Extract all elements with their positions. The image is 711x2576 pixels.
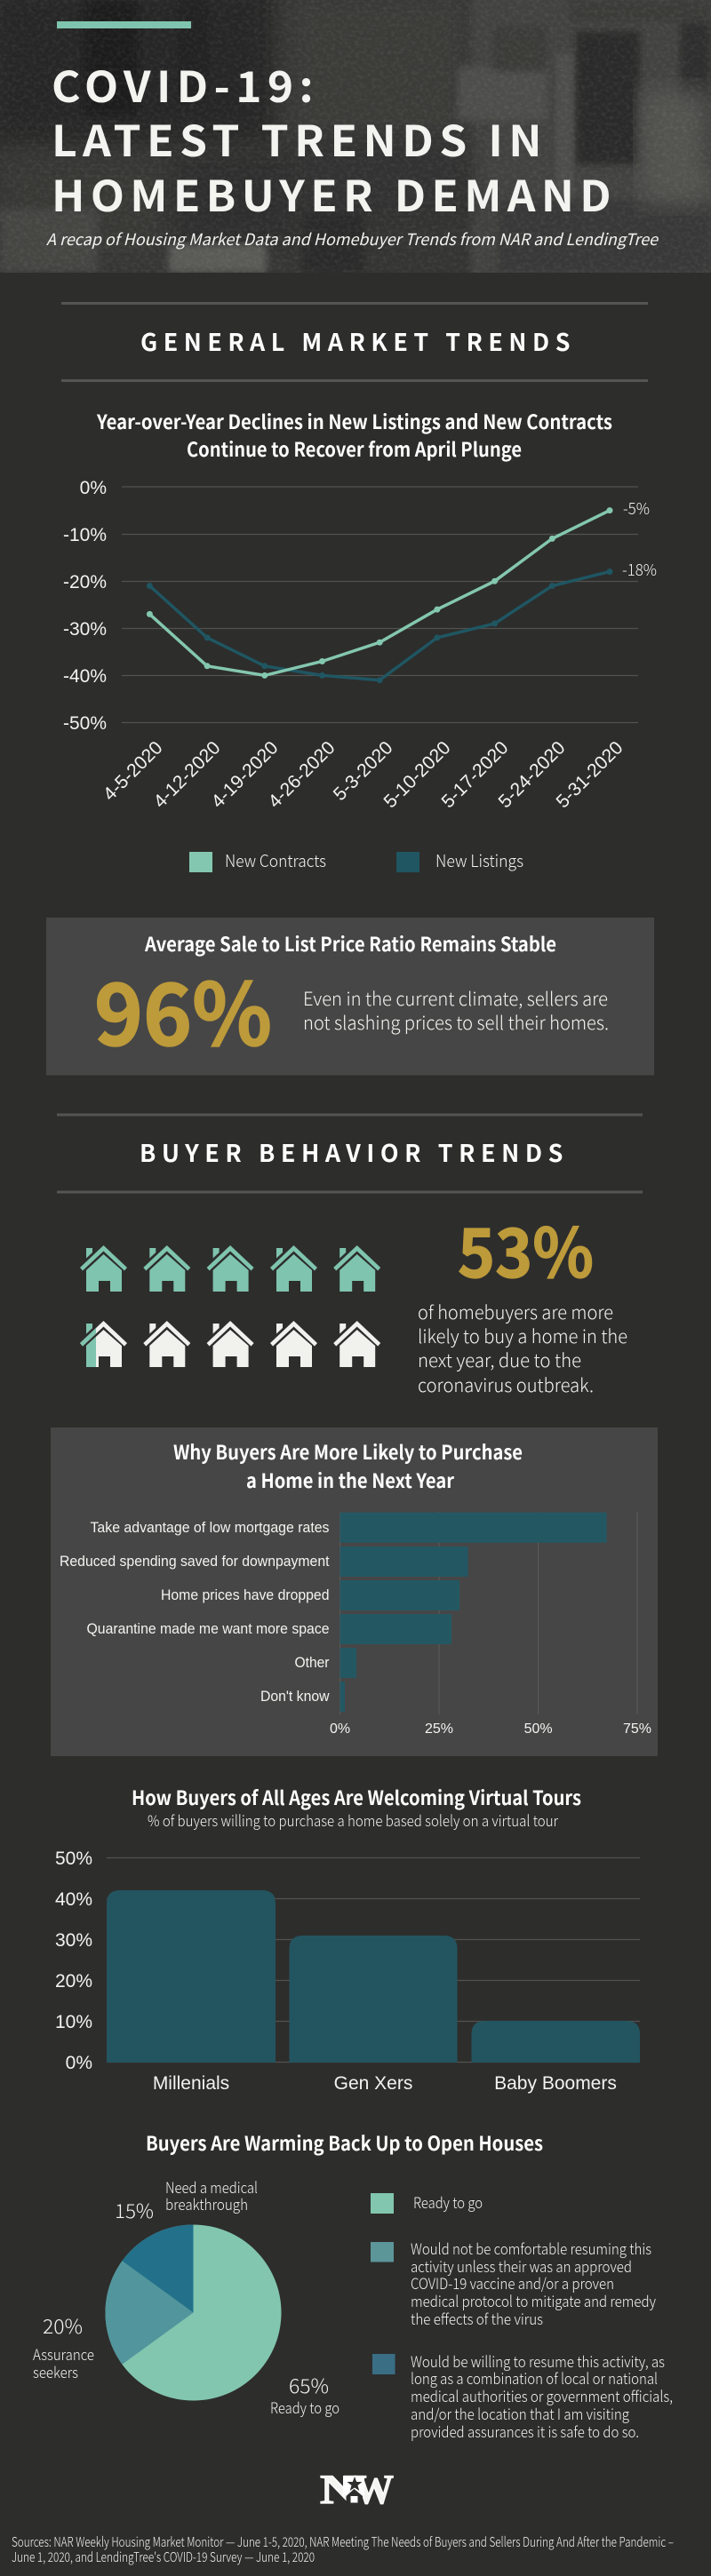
column chart: virtual tours: 10% xyxy=(55,2012,92,2032)
line chart: -10% xyxy=(63,525,107,545)
line chart title: Continue to Recover from April Plunge xyxy=(187,434,522,463)
section heading: general market trends: GENERAL MARKET TRENDS xyxy=(140,323,576,358)
line chart legend xyxy=(189,848,523,872)
line chart: -40% xyxy=(63,666,107,687)
horizontal bar chart: 50% xyxy=(524,1721,553,1737)
horizontal bar chart: Quarantine made me want more space xyxy=(87,1620,329,1637)
pie legend: Ready to go xyxy=(413,2190,483,2213)
line chart: -30% xyxy=(63,619,107,640)
date axis labels: 4-5-2020 xyxy=(100,737,167,805)
virtual tours heading: % of buyers willing to purchase a home based solely on a virtual tour xyxy=(148,1809,559,1831)
line chart title xyxy=(96,407,612,463)
pie labels: Need a medical xyxy=(165,2175,258,2198)
virtual tours heading xyxy=(132,1783,581,1831)
date axis labels xyxy=(100,737,627,812)
title xyxy=(52,52,617,224)
panel: why buyers more likely to purchase xyxy=(51,1427,658,1756)
date axis labels: 5-17-2020 xyxy=(438,737,513,812)
end value labels: -18% xyxy=(622,558,657,581)
line chart legend: New Contracts xyxy=(225,848,326,872)
line chart: 0% xyxy=(80,478,107,498)
date axis labels: 5-31-2020 xyxy=(553,737,627,812)
stat description: homebuyers more likely to buy: next year, due to the xyxy=(418,1347,581,1373)
horizontal bar chart: Home prices have dropped xyxy=(161,1586,329,1603)
logo: N xyxy=(320,2467,357,2513)
pie legend: Would be willing to resume this activity, as xyxy=(411,2349,665,2372)
pie labels: 65% xyxy=(289,2371,329,2399)
stat: 53%: 53% xyxy=(458,1199,594,1297)
column chart: virtual tours: 20% xyxy=(55,1971,92,1992)
stat description: not slashing prices to sell their homes. xyxy=(303,1009,609,1036)
series: new contracts xyxy=(147,508,612,678)
pie labels: 15% xyxy=(115,2196,154,2224)
date axis labels: 4-26-2020 xyxy=(265,737,340,812)
panel: why buyers more likely to purchase: Why Buyers Are More Likely to Purchase xyxy=(173,1437,523,1466)
pie legend: medical authorities or government officials, xyxy=(411,2384,673,2406)
pie labels xyxy=(33,2175,340,2418)
panel: sale to list price ratio xyxy=(46,918,654,1075)
section heading: buyer behavior trends xyxy=(57,1114,643,1194)
line chart xyxy=(63,478,657,812)
title: LATEST TRENDS IN xyxy=(52,107,547,169)
sources xyxy=(12,2532,674,2566)
line chart: -20% xyxy=(63,572,107,592)
pie legend: COVID-19 vaccine and/or a proven xyxy=(411,2271,614,2294)
column chart: virtual tours: 0% xyxy=(66,2053,92,2073)
pie labels: seekers xyxy=(33,2360,78,2382)
column chart: virtual tours: Gen Xers xyxy=(334,2073,412,2094)
horizontal bar chart xyxy=(60,1512,651,1737)
stat description: homebuyers more likely to buy: of homebuyers are more xyxy=(418,1299,613,1325)
accent bar xyxy=(57,21,191,28)
end value labels xyxy=(622,497,657,581)
column chart: virtual tours xyxy=(55,1849,640,2094)
pie legend: Would not be comfortable resuming this xyxy=(411,2237,651,2259)
pie labels: 20% xyxy=(43,2311,83,2340)
end value labels: -5% xyxy=(623,497,650,520)
icon array: houses, 53% filled xyxy=(80,1245,380,1367)
panel: sale to list price ratio: Average Sale to List Price Ratio Remains Stable xyxy=(144,929,556,958)
column chart: virtual tours: Millenials xyxy=(153,2073,229,2094)
stat description: homebuyers more likely to buy xyxy=(418,1299,627,1398)
line chart legend: New Listings xyxy=(435,848,523,872)
stat description: homebuyers more likely to buy: likely to buy a home in the xyxy=(418,1323,627,1349)
date axis labels: 5-10-2020 xyxy=(380,737,455,812)
horizontal bar chart: 0% xyxy=(330,1721,350,1737)
column chart: virtual tours: 30% xyxy=(55,1930,92,1951)
horizontal bar chart: Don't know xyxy=(260,1688,330,1705)
virtual tours heading: How Buyers of All Ages Are Welcoming Virtual Tours xyxy=(132,1783,581,1811)
pie chart xyxy=(105,2224,281,2400)
date axis labels: 4-19-2020 xyxy=(208,737,283,812)
panel: why buyers more likely to purchase: a Home in the Next Year xyxy=(246,1466,454,1494)
logo xyxy=(320,2467,394,2513)
line chart title: Year-over-Year Declines in New Listings and New Contracts xyxy=(96,407,612,435)
logo: W xyxy=(354,2467,394,2513)
pie labels: Assurance xyxy=(33,2342,94,2365)
date axis labels: 5-24-2020 xyxy=(495,737,570,812)
horizontal bar chart: 75% xyxy=(623,1721,651,1737)
open houses title: Buyers Are Warming Back Up to Open Houses xyxy=(146,2128,543,2157)
series: new listings xyxy=(147,569,612,683)
horizontal bar chart: Take advantage of low mortgage rates xyxy=(91,1519,329,1536)
pie legend: provided assurances it is safe to do so. xyxy=(411,2420,639,2442)
column chart: virtual tours: Baby Boomers xyxy=(494,2073,617,2094)
title: COVID-19: xyxy=(52,52,319,115)
date axis labels: 4-12-2020 xyxy=(150,737,225,812)
pie legend: medical protocol to mitigate and remedy xyxy=(411,2289,657,2311)
sources: June 1, 2020, and LendingTree's COVID-19 Survey — June 1, 2020 xyxy=(12,2548,315,2566)
stat description: Even in the current climate, sellers are xyxy=(303,985,608,1012)
horizontal bar chart: Reduced spending saved for downpayment xyxy=(60,1553,330,1570)
stat: 96%: 96% xyxy=(94,947,272,1069)
pie labels: breakthrough xyxy=(165,2192,248,2214)
line chart: -50% xyxy=(63,713,107,734)
section heading: general market trends xyxy=(61,302,648,382)
subtitle: A recap of Housing Market Data and Homebuyer Trends from NAR and LendingTree xyxy=(46,227,659,250)
stat description: homebuyers more likely to buy: coronavirus outbreak. xyxy=(418,1371,594,1398)
date axis labels: 5-3-2020 xyxy=(330,737,397,805)
header photo: street with trees and house xyxy=(0,0,711,282)
horizontal bar chart: 25% xyxy=(425,1721,453,1737)
horizontal bar chart: Other xyxy=(295,1654,330,1671)
title: HOMEBUYER DEMAND xyxy=(52,162,617,224)
pie legend xyxy=(371,2190,673,2442)
stat description xyxy=(303,985,609,1036)
pie legend: long as a combination of local or national xyxy=(411,2366,658,2389)
pie legend: activity unless their was an approved xyxy=(411,2254,632,2277)
pie labels: Ready to go xyxy=(270,2396,340,2418)
section heading: buyer behavior trends: BUYER BEHAVIOR TRENDS xyxy=(140,1134,569,1169)
pie legend: and/or the location that I am visiting xyxy=(411,2402,630,2424)
column chart: virtual tours: 40% xyxy=(55,1889,92,1910)
pie legend: the effects of the virus xyxy=(411,2307,543,2329)
column chart: virtual tours: 50% xyxy=(55,1849,92,1869)
